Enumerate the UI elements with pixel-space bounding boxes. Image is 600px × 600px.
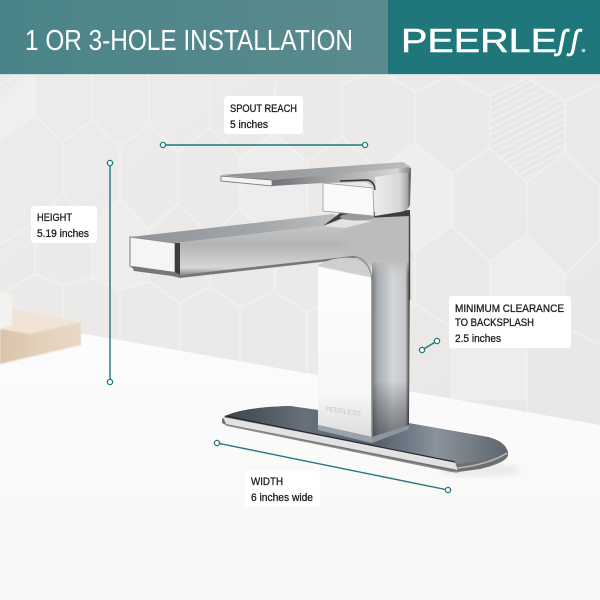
dimension: minimum clearance bbox=[419, 296, 571, 353]
lever bbox=[272, 167, 411, 188]
handle white block bbox=[323, 183, 374, 216]
label: spout reach bbox=[224, 96, 303, 134]
body base collar bbox=[318, 425, 409, 443]
white front panel bbox=[318, 267, 372, 437]
dimension: height bbox=[31, 160, 113, 385]
header band: Peerless logo bbox=[388, 0, 600, 74]
header band: title bbox=[0, 0, 600, 75]
tiled wall background bbox=[0, 0, 600, 440]
label: minimum clearance: MINIMUM CLEARANCE bbox=[455, 303, 564, 315]
label: minimum clearance: 2.5 inches bbox=[455, 333, 501, 345]
title text: 1 OR 3-HOLE INSTALLATION bbox=[25, 25, 353, 57]
deck plate bbox=[222, 406, 508, 472]
faucet bbox=[130, 162, 520, 477]
label: spout reach: 5 inches bbox=[230, 119, 268, 131]
label: height: 5.19 inches bbox=[37, 228, 89, 240]
label: width bbox=[245, 471, 320, 507]
plate shadow bbox=[440, 463, 520, 477]
neck between spout and handle bbox=[323, 210, 410, 228]
dimension: width bbox=[214, 440, 451, 507]
label: minimum clearance bbox=[449, 296, 571, 348]
header band: Peerless logo: ʃʃ bbox=[554, 25, 583, 57]
label: width: WIDTH bbox=[251, 476, 283, 488]
soap dish bbox=[0, 293, 81, 364]
engraved brand: PEERLESS bbox=[325, 406, 362, 418]
label: height bbox=[31, 206, 97, 243]
header band: Peerless logo: PEERLE bbox=[401, 22, 557, 59]
label: width: 6 inches wide bbox=[251, 492, 313, 504]
countertop bbox=[0, 319, 600, 600]
label: height: HEIGHT bbox=[37, 212, 72, 224]
label: minimum clearance: TO BACKSPLASH bbox=[455, 317, 534, 329]
dimension: spout reach bbox=[160, 96, 368, 148]
label: spout reach: SPOUT REACH bbox=[230, 103, 297, 115]
faucet body and spout side bbox=[175, 215, 410, 275]
spout front face bbox=[130, 237, 175, 274]
handle cap bbox=[373, 167, 411, 216]
spout top face bbox=[130, 214, 340, 243]
